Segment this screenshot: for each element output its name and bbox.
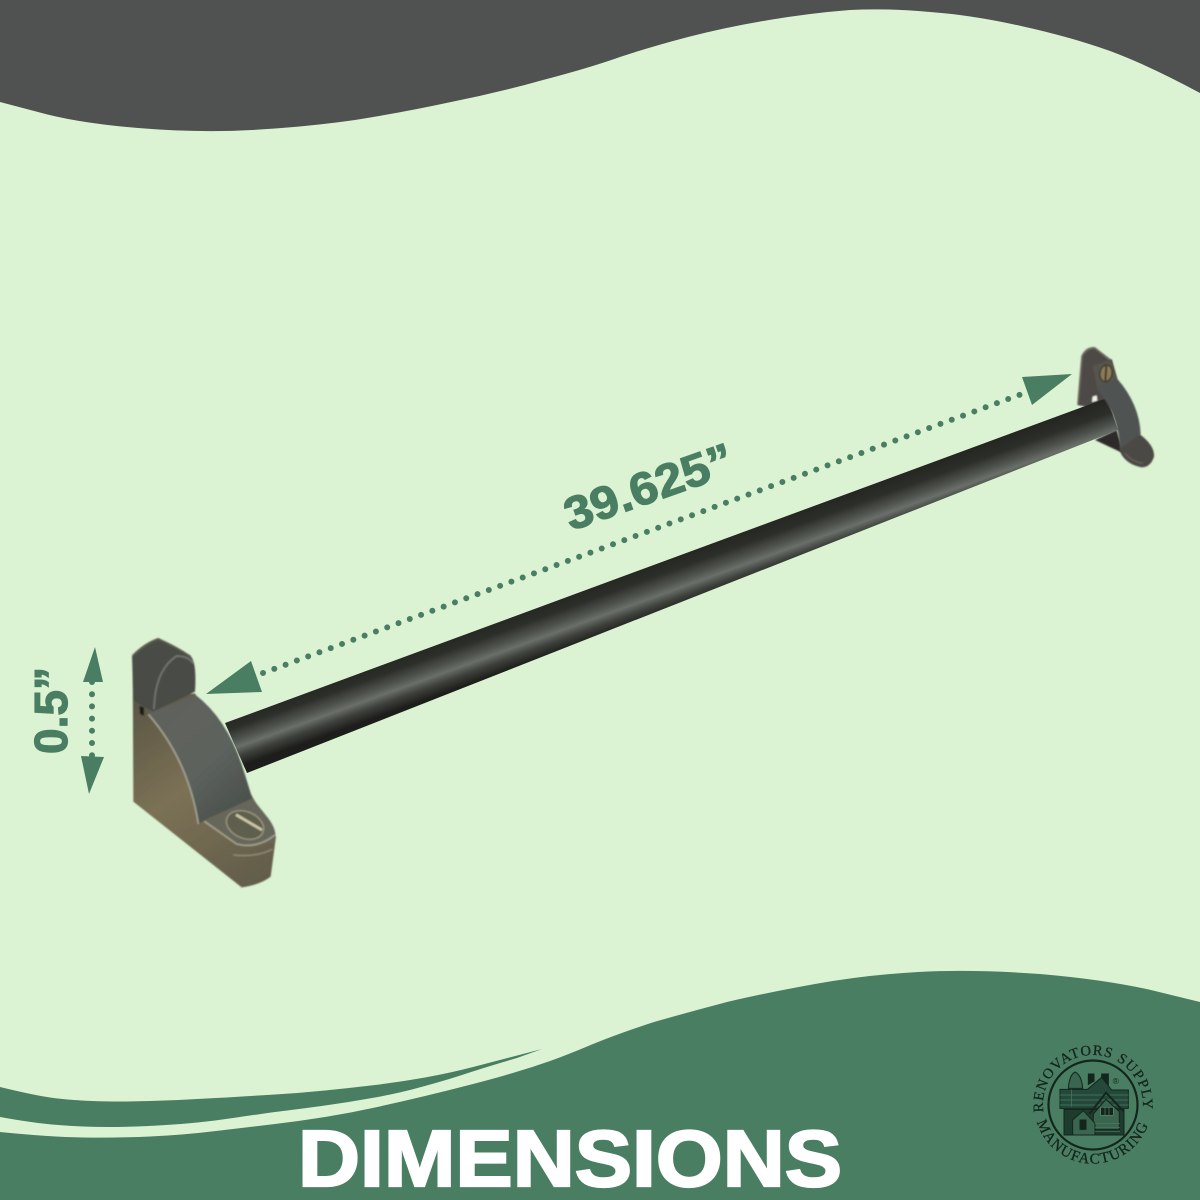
dotted height line (89, 682, 95, 758)
dotted length line (263, 391, 1031, 673)
height dimension arrow (81, 647, 104, 794)
left bracket body (133, 657, 276, 887)
left bracket top tab (132, 638, 195, 712)
product: rod with brackets (132, 347, 1154, 887)
logo top text: RENOVATORS SUPPLY (1033, 1045, 1153, 1112)
logo house: ® (1113, 1076, 1120, 1086)
right bracket back plate (1077, 347, 1123, 453)
top dark grey wave (0, 0, 1200, 131)
arrowhead left (206, 661, 262, 694)
rod (225, 398, 1118, 773)
left bracket (132, 638, 276, 887)
main green wave (0, 971, 1200, 1200)
bottom green wave with swoosh (0, 971, 1200, 1200)
height label: 0.5” (25, 667, 77, 754)
logo: Renovators Supply Manufacturing (1033, 1045, 1153, 1164)
length label: 39.625” (557, 433, 740, 540)
screw (222, 805, 268, 845)
left bracket clamp (148, 695, 252, 824)
length dimension arrow (206, 374, 1072, 694)
arrowhead right (1022, 374, 1072, 405)
logo ring (1048, 1060, 1138, 1150)
arrowhead down (81, 756, 104, 794)
arrowhead up (83, 647, 103, 682)
swoosh (0, 1049, 542, 1127)
logo bottom text: MANUFACTURING (1036, 1118, 1148, 1164)
right bracket clamp (1093, 359, 1154, 467)
left bracket foot (204, 798, 275, 847)
